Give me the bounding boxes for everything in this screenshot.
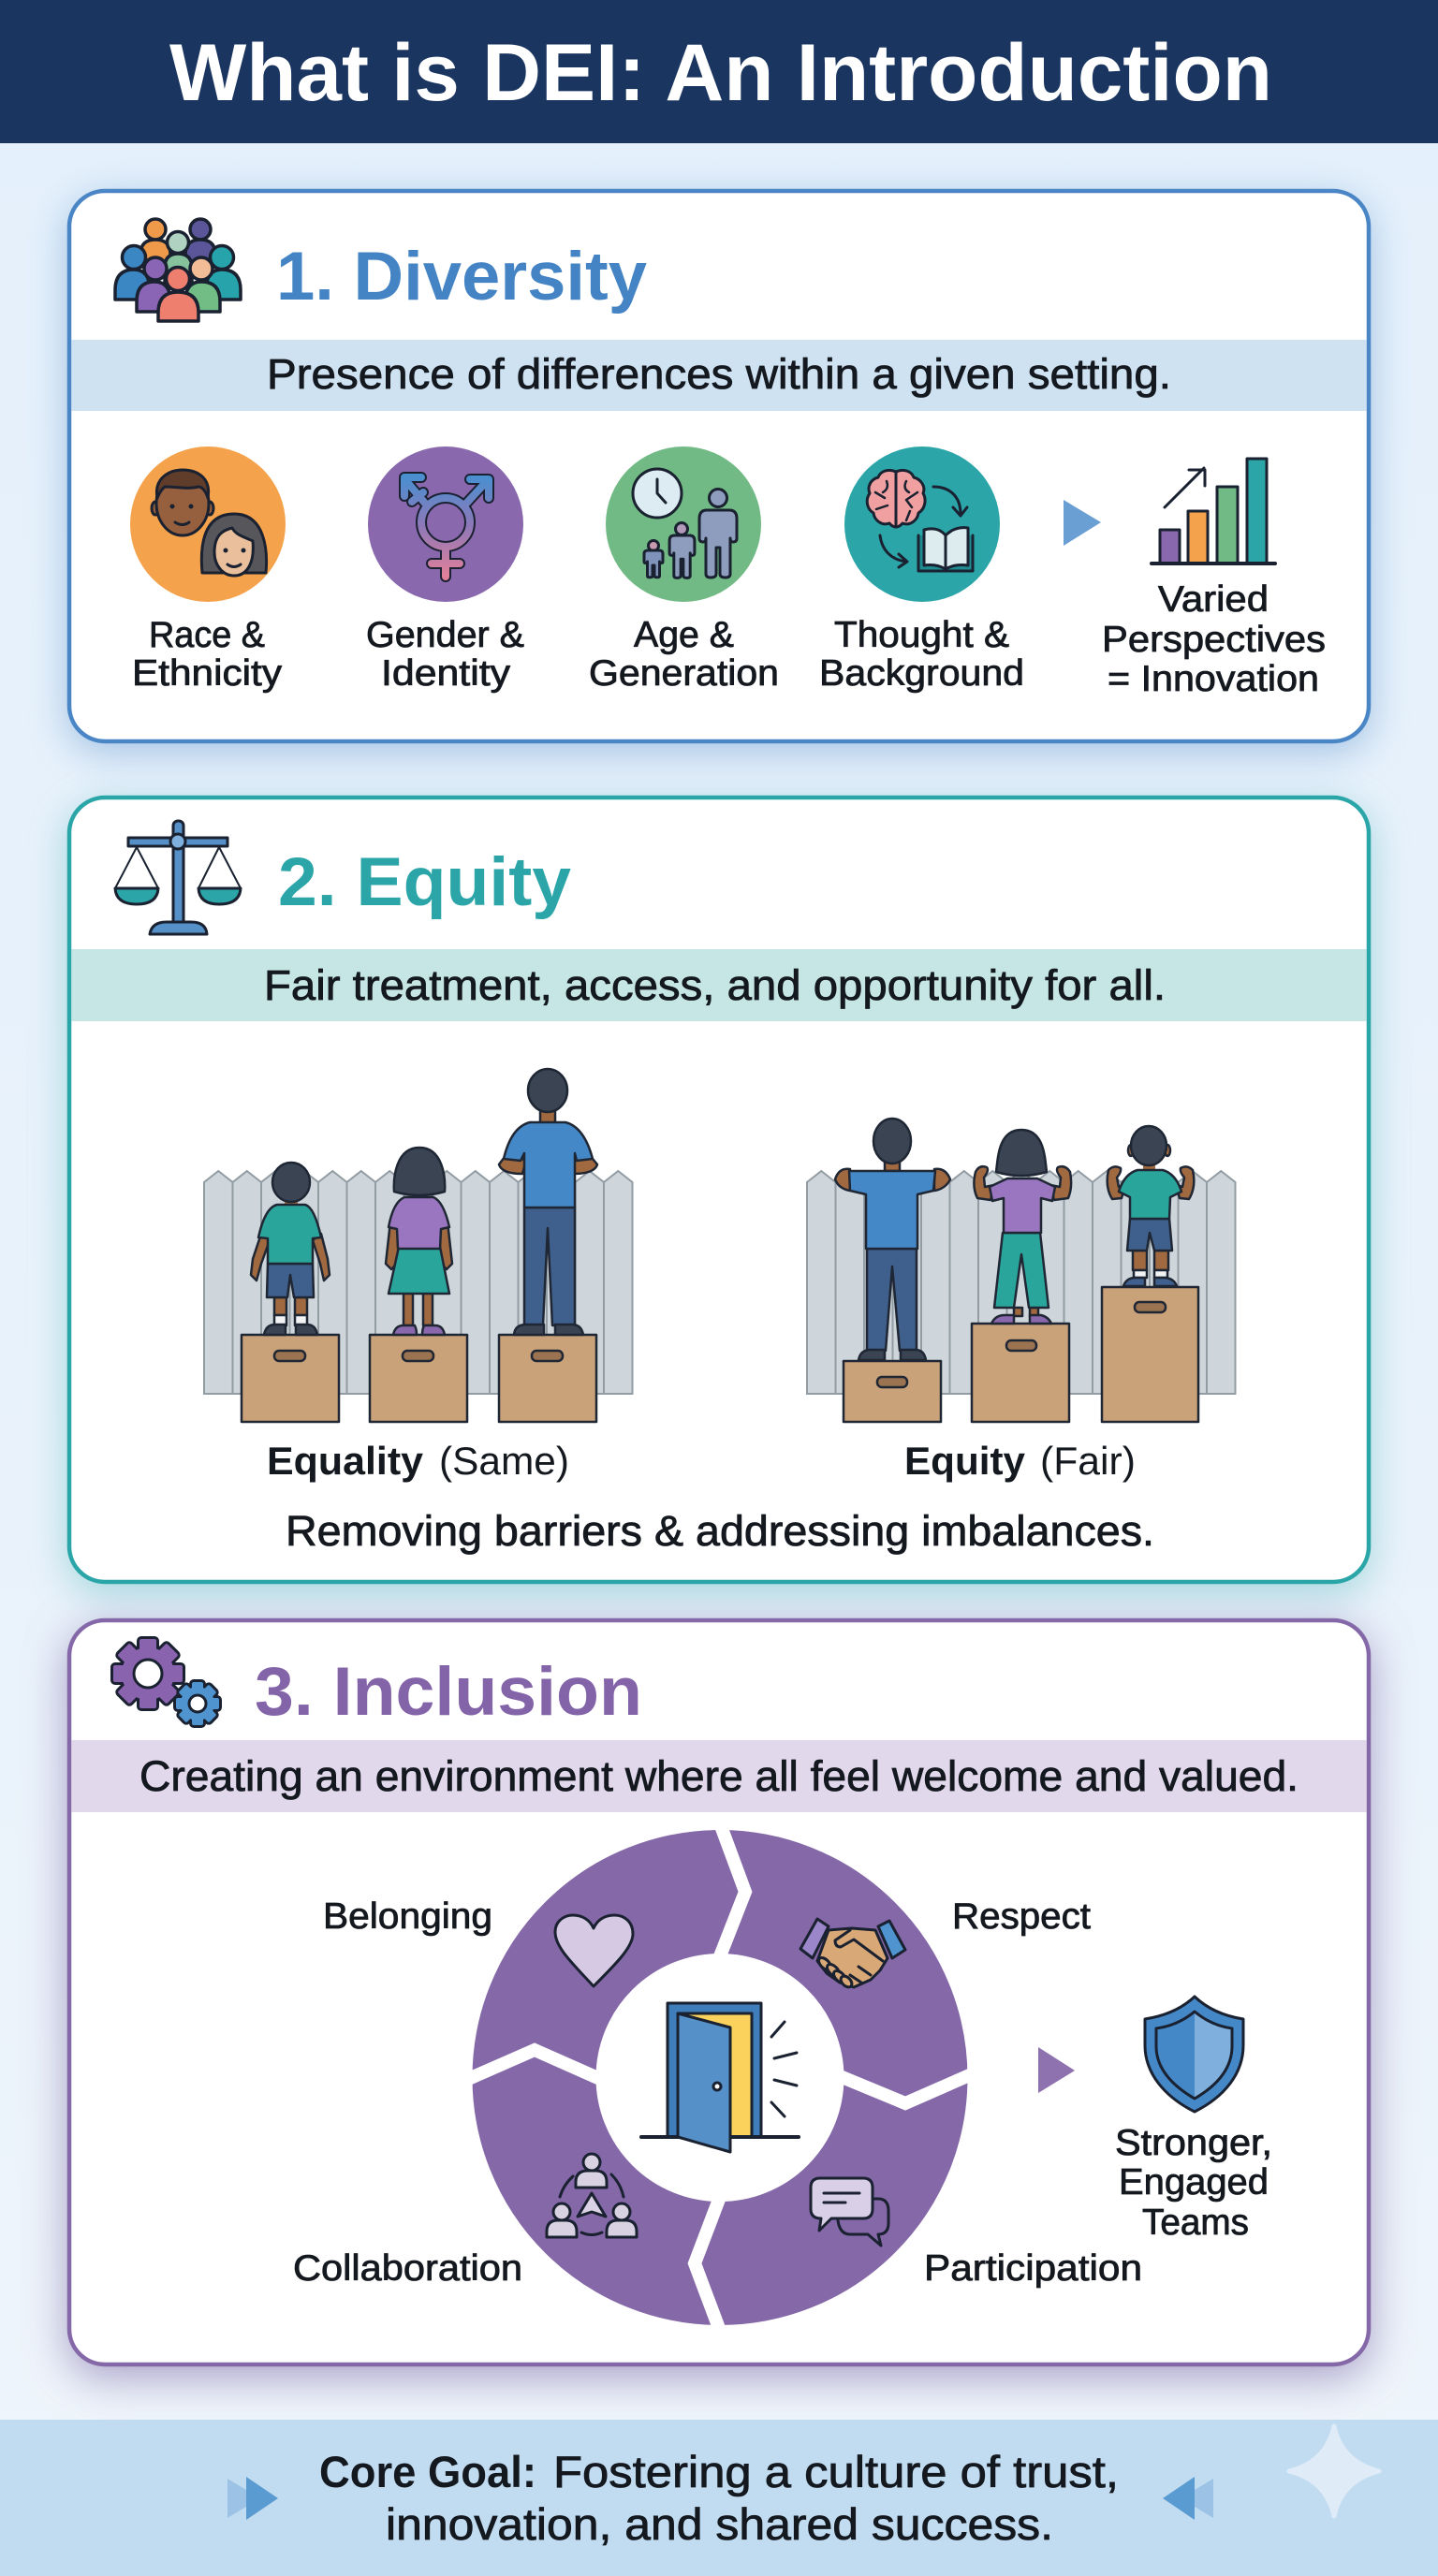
icon: growth bar chart: [1152, 459, 1275, 564]
footer banner: [0, 2420, 1438, 2576]
arrow: inclusion to teams: [1038, 2047, 1075, 2093]
illustration: equity, different boxes: [807, 1119, 1236, 1422]
fence: [204, 1171, 633, 1394]
fence: [807, 1171, 1236, 1394]
label: varied perspectives: = Innovation: [1108, 659, 1319, 699]
man on short box: [835, 1119, 950, 1360]
text: removing barriers: Removing barriers & addressing imbalances.: [286, 1507, 1154, 1555]
icon: sparkle: [1289, 2426, 1379, 2516]
girl on box: [386, 1148, 452, 1335]
icon: handshake: [800, 1919, 905, 1989]
label: thought and background: Background: [819, 653, 1024, 694]
boxes: [242, 1335, 596, 1422]
icon: chat bubbles: [811, 2178, 888, 2246]
label: equity: Equity: [904, 1439, 1026, 1483]
icon: open door: [641, 2003, 799, 2152]
label: equity: (Fair): [1040, 1439, 1136, 1483]
label: race and ethnicity: Ethnicity: [132, 653, 283, 694]
label: age and generation: Generation: [589, 653, 779, 694]
icon: gears: [113, 1639, 219, 1725]
panel: equity: [69, 798, 1369, 1582]
label: participation: Participation: [924, 2248, 1142, 2289]
icon: group of people: [115, 219, 241, 321]
label: stronger engaged teams: Stronger,: [1115, 2123, 1272, 2163]
inclusion definition band: [71, 1740, 1367, 1812]
core goal text: Fostering a culture of trust,: [553, 2447, 1119, 2496]
label: gender and identity: Gender &: [366, 615, 524, 655]
heading: equity: 2. Equity: [278, 844, 571, 920]
panel: inclusion: [0, 1620, 1438, 2576]
label: thought and background: [819, 615, 1024, 694]
illustration: equality, same boxes: [204, 1069, 633, 1422]
label: thought and background: Thought &: [834, 615, 1009, 655]
icon: gender identity: [368, 446, 523, 602]
core goal text: Core Goal:: [319, 2447, 536, 2496]
label: stronger engaged teams: [1115, 2123, 1272, 2243]
diversity definition band: [71, 340, 1367, 411]
label: stronger engaged teams: Teams: [1142, 2203, 1249, 2243]
heading: diversity: 1. Diversity: [276, 239, 647, 315]
label: collaboration: Collaboration: [293, 2248, 522, 2289]
label: equality: Equality: [267, 1439, 424, 1483]
label: age and generation: [589, 615, 779, 694]
label: varied perspectives: [1102, 579, 1326, 699]
icon: collaboration: [547, 2154, 637, 2237]
label: race and ethnicity: [132, 615, 283, 694]
heading: inclusion: 3. Inclusion: [255, 1654, 642, 1730]
equity definition band: Fair treatment, access, and opportunity for all.: [264, 961, 1166, 1009]
header banner: [0, 0, 1438, 143]
label: varied perspectives: Perspectives: [1102, 620, 1326, 660]
label: varied perspectives: Varied: [1158, 579, 1269, 620]
equity definition band: [71, 949, 1367, 1021]
boxes: [844, 1287, 1198, 1422]
core goal text: [319, 2447, 1119, 2549]
icon: heart: [555, 1915, 633, 1986]
label: equality: (Same): [439, 1439, 569, 1483]
label: age and generation: Age &: [634, 615, 734, 655]
label: gender and identity: [366, 615, 524, 694]
boy on box: [251, 1163, 330, 1335]
label: respect: Respect: [952, 1896, 1091, 1937]
arrow: diversity to innovation: [1064, 500, 1101, 546]
inclusion definition band: Creating an environment where all feel welcome and valued.: [139, 1752, 1299, 1800]
arrow: left chevrons: [227, 2477, 278, 2520]
man on box: [499, 1069, 597, 1335]
title: What is DEI: An Introduction: [169, 28, 1272, 118]
label: stronger engaged teams: Engaged: [1119, 2162, 1269, 2203]
donut chart: four pillars: [293, 1823, 1272, 2331]
icon: balance scale: [115, 821, 241, 934]
core goal text: innovation, and shared success.: [386, 2499, 1053, 2549]
diversity definition band: Presence of differences within a given setting.: [267, 350, 1171, 398]
label: race and ethnicity: Race &: [149, 615, 265, 655]
label: belonging: Belonging: [323, 1896, 492, 1937]
boy on tall box: [1108, 1126, 1194, 1286]
label: gender and identity: Identity: [381, 653, 511, 694]
icon: thought and background: [844, 446, 1000, 602]
panel: diversity: [69, 191, 1369, 741]
icon: race and ethnicity: [130, 446, 286, 602]
girl on medium box: [974, 1130, 1071, 1324]
arrow: right chevrons: [1163, 2477, 1213, 2520]
icon: age and generation: [606, 446, 761, 602]
label: equality: [267, 1439, 569, 1483]
label: equity: [904, 1439, 1136, 1483]
icon: shield: [1145, 1997, 1243, 2112]
